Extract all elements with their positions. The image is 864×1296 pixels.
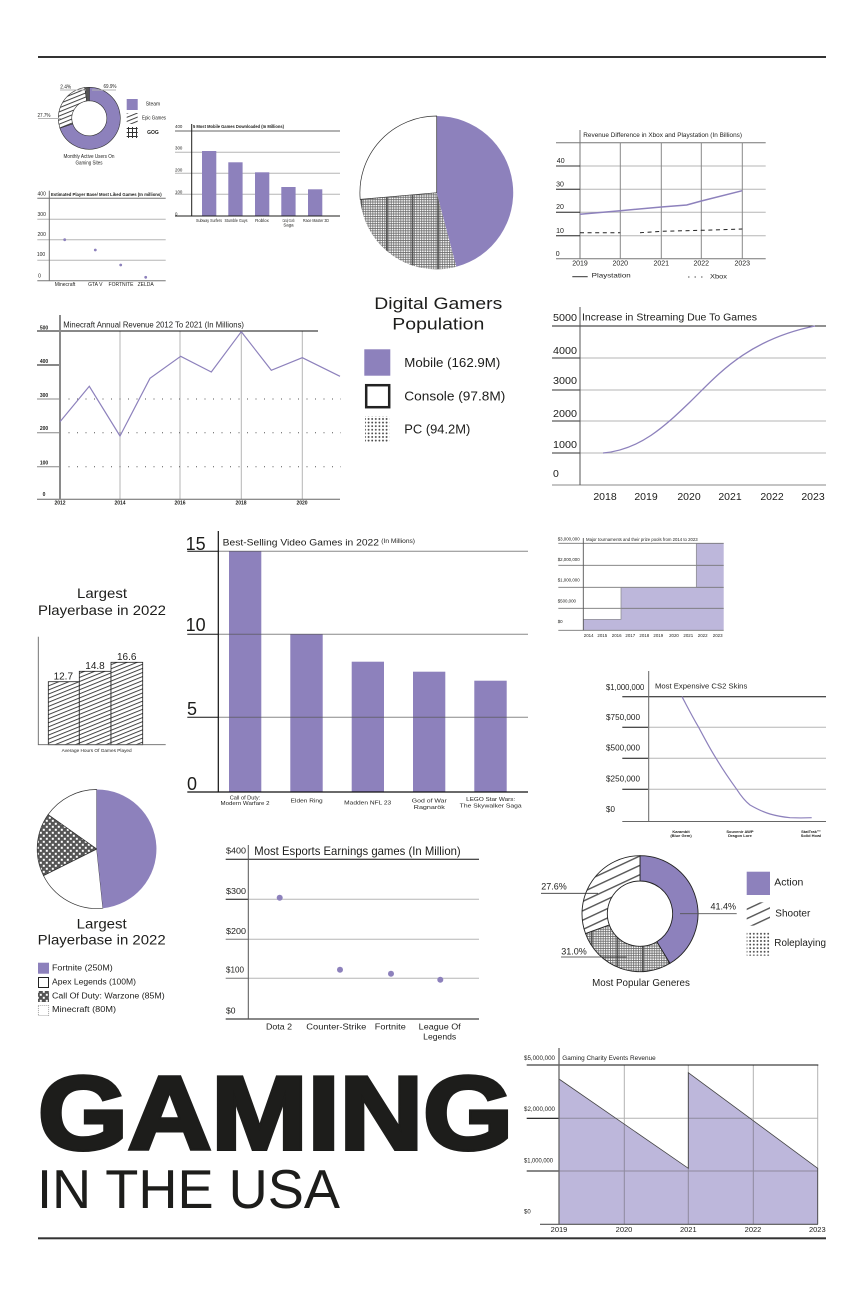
pie: gamer population [360, 116, 513, 269]
minecraft title: Minecraft Annual Revenue 2012 To 2021 (In Millions) [63, 320, 244, 330]
streaming axis labels: 2018 [593, 491, 617, 503]
revenue axis labels: 2021 [654, 260, 669, 268]
panel: digital gamers population [360, 116, 513, 442]
playerbase heading: Largest [77, 915, 127, 931]
bestseller game names: Modern Warfare 2 [220, 801, 270, 807]
skins axis labels: $250,000 [606, 774, 641, 784]
bar values: 12.7 [54, 672, 73, 682]
prize axis labels: 2023 [713, 633, 723, 638]
prize axis labels: 2018 [639, 633, 650, 638]
streaming axis labels [553, 312, 825, 503]
panel: monthly active users donut [38, 84, 166, 166]
mobile chart axis labels: Subway Surfers [196, 218, 223, 223]
scatter axis labels: 100 [37, 252, 45, 258]
skins axis labels: $0 [606, 805, 615, 814]
prize grid [558, 543, 724, 630]
donut legend: GOG [147, 130, 159, 136]
mobile chart title: 5 Most Mobile Games Downloaded (In Millions) [193, 124, 284, 129]
esports grid [248, 899, 479, 978]
genre percentage labels [541, 881, 737, 957]
minecraft grid [120, 331, 302, 499]
esports points [277, 895, 443, 983]
donut percentage labels [38, 84, 117, 119]
panel: esports earnings scatter [226, 844, 479, 1042]
charity axis labels [524, 1056, 556, 1215]
charity title: Gaming Charity Events Revenue [562, 1056, 656, 1062]
donut caption: Gaming Sites [76, 160, 103, 166]
streaming axis labels: 2019 [634, 491, 658, 503]
charity area [559, 1073, 818, 1224]
scatter axis labels: 200 [38, 232, 46, 238]
bestseller game names: Madden NFL 23 [344, 800, 391, 806]
streaming axis labels: 4000 [553, 345, 577, 357]
panel: most popular genres donut [541, 856, 826, 989]
playerbase legend [38, 963, 165, 1016]
scatter axis labels: 400 [38, 191, 46, 197]
charity year labels: 2020 [616, 1225, 632, 1234]
charity axes [558, 1048, 560, 1224]
population heading [374, 294, 502, 334]
minecraft axis labels: 200 [40, 426, 48, 432]
playstation line [580, 191, 742, 214]
population heading: Digital Gamers [374, 294, 502, 313]
panel: largest playerbase pie [37, 789, 166, 1016]
charity axis labels: $2,000,000 [524, 1107, 556, 1113]
hours axes [38, 637, 166, 745]
streaming axis labels: 2023 [801, 491, 825, 503]
panel: best-selling video games bar chart [186, 531, 528, 811]
mobile chart axis labels: Stumble Guys [224, 218, 248, 223]
hatched bars [48, 662, 143, 745]
pie: playerbase share [37, 789, 156, 909]
esports axis labels: $300 [226, 886, 246, 896]
esports axis labels: Legends [423, 1032, 456, 1042]
bestseller game names: Elden Ring [291, 798, 323, 804]
streaming axis labels: 0 [553, 468, 559, 480]
bestseller game names: LEGO Star Wars: [466, 797, 516, 803]
prize axis labels: 2020 [669, 633, 679, 638]
streaming grid [552, 358, 826, 485]
skin names: Souvenir AWP [726, 829, 754, 834]
esports axis labels: League Of [419, 1022, 461, 1032]
skin names: Solid Howl [801, 833, 821, 838]
genre percentage labels: 31.0% [561, 947, 587, 957]
revenue axis labels: 30 [556, 182, 564, 188]
revenue axis labels: 2022 [694, 260, 709, 268]
skin names: Karambit [672, 829, 690, 834]
scatter axis labels [37, 191, 154, 288]
revenue axis labels: 2019 [572, 260, 588, 268]
panel: tournament prize pools step area chart [558, 536, 724, 638]
streaming axis labels: 2000 [553, 408, 577, 420]
charity year labels: 2022 [745, 1225, 761, 1234]
scatter axis labels: 0 [38, 274, 41, 280]
skins axis labels [606, 683, 645, 814]
prize axis labels: $1,000,000 [558, 578, 580, 582]
mobile chart axis labels: Race Master 3D [303, 218, 329, 223]
bestseller axis labels: 15 [186, 534, 206, 554]
mobile chart axis labels: Saga [283, 222, 294, 227]
prize axis labels: 2015 [597, 633, 608, 638]
genres legend: Shooter [775, 908, 811, 920]
minecraft axis labels [40, 325, 308, 507]
streaming axis labels: 5000 [553, 312, 577, 324]
prize axis labels: $3,000,000 [558, 536, 580, 542]
streaming axis labels: 3000 [553, 375, 577, 387]
streaming title: Increase in Streaming Due To Games [582, 312, 757, 324]
population legend: Console (97.8M) [404, 388, 505, 404]
prize axis labels: 2017 [625, 633, 636, 638]
donut ring: gaming sites [58, 87, 120, 149]
bestseller title: Best-Selling Video Games in 2022 [223, 537, 379, 547]
skin names: (Blue Gem) [670, 833, 692, 838]
bestseller axis labels: 10 [186, 615, 206, 635]
population legend [364, 349, 505, 442]
scatter axis labels: FORTNITE [109, 282, 134, 288]
streaming curve [603, 326, 815, 453]
heading: largest playerbase (hours chart): Playerbase in 2022 [38, 602, 166, 618]
skins title: Most Expensive CS2 Skins [655, 682, 748, 690]
panel: average hours hatched bars [38, 637, 166, 753]
prize axis labels: 2016 [612, 633, 622, 638]
revenue legend [572, 272, 728, 280]
donut percentage labels: 69.9% [104, 84, 117, 90]
scatter points [63, 238, 147, 279]
minecraft axis labels: 2012 [54, 501, 66, 507]
scatter title: Estimated Player Base/ Most Liked Games (In millions) [51, 192, 162, 197]
subtitle: in the USA: IN THE USA [37, 1158, 340, 1220]
revenue legend: Xbox [710, 274, 728, 280]
prize axis labels: 2019 [653, 633, 664, 638]
esports axis labels: $400 [226, 846, 246, 856]
charity axis labels: $0 [524, 1209, 531, 1215]
minecraft axis labels: 400 [40, 359, 48, 365]
donut percentage labels: 27.7% [38, 113, 51, 119]
skins axis labels: $1,000,000 [606, 683, 645, 692]
genres legend: Roleplaying [774, 938, 826, 949]
main title: GAMING: GAMING [38, 1056, 513, 1172]
charity axis labels: $5,000,000 [524, 1056, 556, 1062]
mobile chart axis labels: Roblox [255, 218, 270, 223]
charity year labels: 2023 [809, 1225, 826, 1234]
esports axis labels: $0 [226, 1006, 236, 1016]
minecraft axis labels: 2018 [235, 501, 247, 507]
prize axis labels: 2022 [698, 633, 708, 638]
panel: estimated player base scatter [37, 191, 166, 288]
skin names: StatTrak™ [801, 829, 821, 834]
bestseller game names [220, 796, 523, 811]
genre percentage labels: 41.4% [711, 901, 736, 911]
mobile chart axis labels: 300 [175, 146, 183, 150]
genres legend: Action [774, 878, 803, 888]
scatter axis labels: 300 [38, 212, 46, 218]
prize axis labels: $0 [558, 619, 563, 624]
mobile chart axis labels: 400 [175, 124, 183, 129]
bestseller game names: Ragnarök [414, 805, 445, 811]
scatter axis labels: Minecraft [55, 282, 76, 288]
minecraft axis labels: 2020 [296, 501, 308, 507]
playerbase heading: Playerbase in 2022 [38, 931, 166, 947]
donut legend: Epic Games [142, 115, 166, 121]
mobile chart bars [202, 151, 322, 216]
scatter axis labels: GTA V [88, 282, 103, 288]
esports axis labels: $100 [226, 965, 244, 975]
panel: minecraft annual revenue line chart [37, 315, 341, 507]
charity axis labels: $1,000,000 [524, 1159, 554, 1165]
xbox dashed line [580, 229, 742, 233]
donut ring: genres [582, 856, 698, 972]
bestseller game names: God of War [412, 799, 447, 805]
revenue axis labels: 20 [556, 204, 564, 211]
prize axis labels [558, 536, 723, 638]
bestseller subtitle: (In Millions) [381, 539, 415, 545]
prize axis labels: $2,000,000 [558, 557, 580, 562]
prize axis labels: 2014 [584, 633, 594, 638]
minecraft axis labels: 2016 [174, 501, 186, 507]
revenue axis labels: 0 [556, 251, 560, 258]
charity year labels: 2021 [680, 1225, 697, 1234]
heading: largest playerbase (hours chart): Largest [77, 585, 127, 601]
mobile chart axis labels [175, 124, 329, 227]
donut caption: Monthly Active Users On [64, 154, 115, 160]
revenue axis labels: 2020 [613, 260, 628, 268]
streaming axis labels: 1000 [553, 439, 577, 451]
panel: mobile games downloaded bar chart [175, 124, 340, 227]
donut caption [64, 154, 115, 166]
skin names: Dragon Lore [728, 833, 753, 838]
playerbase legend: Apex Legends (100M) [52, 978, 136, 986]
panel: gaming charity events area chart [524, 1048, 826, 1234]
revenue axis labels [556, 158, 750, 268]
playerbase legend: Fortnite (250M) [52, 964, 113, 972]
panel: xbox and playstation revenue line chart [556, 130, 766, 280]
mobile chart axis labels: 0 [175, 212, 178, 216]
charity outline [559, 1073, 818, 1224]
mobile chart axes [175, 124, 340, 216]
minecraft axis labels: 500 [40, 325, 48, 331]
playerbase heading [38, 915, 166, 947]
skins axis labels: $500,000 [606, 744, 641, 752]
donut legend: Steam [146, 101, 160, 107]
skins grid [648, 727, 826, 789]
heading: largest playerbase (hours chart) [38, 585, 166, 618]
donut percentage labels: 2.4% [60, 84, 72, 90]
top rule [38, 56, 826, 58]
hours caption: Average Hours Of Games Played [62, 748, 132, 753]
skins axis labels: $750,000 [606, 713, 641, 722]
bestseller axis labels [186, 534, 206, 794]
esports axis labels: Counter-Strike [306, 1022, 367, 1032]
bestseller grid [218, 551, 528, 717]
panel: streaming growth line chart [552, 307, 826, 503]
bestseller bars [229, 551, 507, 792]
esports axis labels: Fortnite [375, 1022, 406, 1032]
genre percentage labels: 27.6% [541, 881, 567, 891]
mobile chart axis labels: 200 [175, 168, 183, 172]
mobile chart grid [175, 152, 340, 194]
prize axis labels: 2021 [683, 633, 694, 638]
skin names [670, 829, 821, 838]
bar values [54, 652, 137, 682]
esports title: Most Esports Earnings games (In Million) [254, 844, 461, 858]
revenue legend: Playstation [592, 272, 631, 280]
esports axis labels [226, 846, 461, 1042]
bestseller game names: The Skywalker Saga [460, 803, 523, 809]
bar values: 16.6 [117, 652, 137, 663]
minecraft revenue line [60, 332, 340, 436]
revenue axis labels: 40 [557, 158, 565, 165]
donut legend [127, 99, 166, 138]
bar values: 14.8 [85, 661, 105, 672]
genres caption: Most Popular Generes [592, 978, 690, 989]
bestseller axis labels: 0 [187, 774, 197, 794]
revenue title: Revenue Difference in Xbox and Playstation (In Billions) [583, 133, 742, 139]
revenue grid [556, 166, 766, 236]
scatter grid [37, 219, 166, 260]
playerbase legend: Minecraft (80M) [52, 1005, 116, 1014]
scatter axis [48, 191, 50, 281]
charity grid [559, 1065, 818, 1224]
minecraft axis labels: 100 [40, 460, 48, 466]
esports axis labels: $200 [226, 926, 246, 936]
skins price curve [682, 697, 812, 818]
bestseller axes [187, 531, 528, 792]
bottom rule [38, 1237, 826, 1239]
population legend: Mobile (162.9M) [404, 355, 500, 370]
prize title: Major tournaments and their prize pools from 2014 to 2023 [586, 537, 698, 542]
bestseller axis labels: 5 [187, 699, 197, 719]
revenue axis labels: 2023 [735, 260, 750, 268]
minecraft axis labels: 0 [43, 492, 46, 498]
minecraft axis labels: 300 [40, 393, 48, 399]
streaming axis labels: 2020 [677, 491, 701, 503]
streaming axis labels: 2021 [718, 491, 742, 503]
minecraft axis labels: 2014 [114, 501, 126, 507]
prize axis labels: $500,000 [558, 598, 577, 604]
playerbase legend: Call Of Duty: Warzone (85M) [52, 992, 165, 1000]
revenue axis labels: 10 [556, 228, 564, 235]
population heading: Population [392, 314, 484, 334]
scatter axis labels: ZELDA [138, 282, 154, 288]
bestseller game names: Call of Duty: [230, 796, 261, 802]
genres legend [747, 872, 826, 956]
mobile chart axis labels: 100 [175, 190, 183, 194]
charity year labels: 2019 [551, 1225, 567, 1234]
prize area [583, 543, 724, 630]
population legend: PC (94.2M) [404, 422, 470, 436]
panel: most expensive CS2 skins [606, 671, 826, 838]
mobile chart axis labels: Candy Crush [282, 218, 295, 223]
esports axis labels: Dota 2 [266, 1022, 292, 1032]
charity year labels [551, 1225, 826, 1234]
streaming axis labels: 2022 [760, 491, 784, 503]
